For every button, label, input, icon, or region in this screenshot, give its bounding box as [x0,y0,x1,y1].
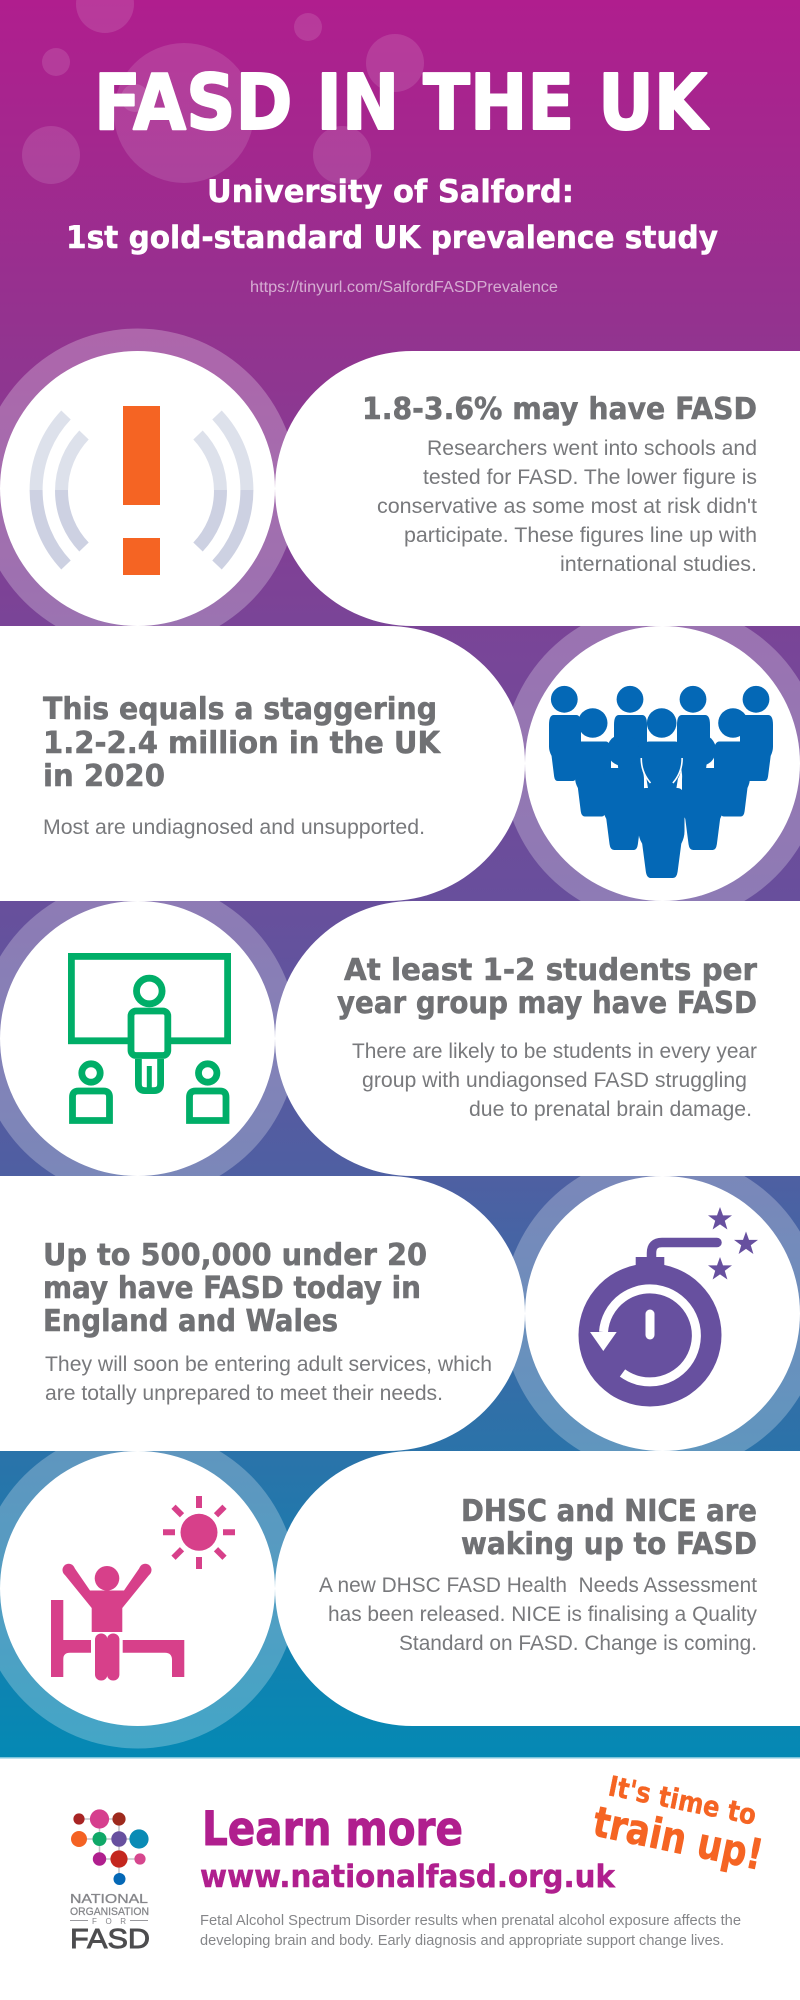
icon ring [0,1451,287,1748]
body text: A new DHSC FASD Health Needs Assessment [319,1574,757,1597]
heading: This equals a staggering [43,692,437,727]
icon ring [513,626,800,901]
panel: header [22,0,718,296]
footer description [200,1913,741,1949]
body text [352,1040,757,1121]
body text [45,1353,492,1405]
icon ring [0,901,287,1176]
heading: year group may have FASD [337,986,757,1021]
icon: person waking with sun [51,1496,235,1680]
heading: may have FASD today in [43,1271,421,1306]
footer top line [0,1757,800,1758]
heading: DHSC and NICE are [461,1494,757,1529]
footer description: developing brain and body. Early diagnosis and appropriate support change lives. [200,1933,724,1949]
decorative bubbles [22,0,424,184]
body text: Most are undiagnosed and unsupported. [43,816,425,839]
heading: England and Wales [43,1304,338,1339]
logo: National Organisation for FASD: ORGANISATION [70,1906,149,1918]
heading: Up to 500,000 under 20 [43,1238,427,1273]
footer description: Fetal Alcohol Spectrum Disorder results when prenatal alcohol exposure affects the [200,1913,741,1929]
panel: footer [0,1757,800,2000]
body text: Researchers went into schools and [427,437,757,460]
icon circle [0,351,275,626]
footer background [0,1757,800,2000]
icon: time bomb [578,1207,758,1406]
body text: There are likely to be students in every year [352,1040,757,1063]
panel: students per year group [0,901,800,1176]
panel: prevalence 1.8-3.6% [0,328,800,648]
body text: has been released. NICE is finalising a Quality [328,1603,757,1626]
website url: www.nationalfasd.org.uk [200,1859,616,1895]
text pill [275,1451,800,1726]
title: FASD IN THE UK [94,59,709,148]
icon: exclamation alert [36,406,247,575]
icon circle [525,626,800,901]
body text: conservative as some most at risk didn't [377,495,757,518]
heading: in 2020 [43,759,165,794]
learn more heading: Learn more [202,1802,463,1857]
icon circle [0,901,275,1176]
heading [43,692,442,794]
source link: https://tinyurl.com/SalfordFASDPrevalence [250,279,558,296]
text pill [0,626,525,901]
body text: They will soon be entering adult services, which [45,1353,492,1376]
subtitle line 1: University of Salford: [207,174,574,210]
icon: crowd of people [549,686,773,878]
heading: waking up to FASD [461,1527,757,1562]
heading: 1.8-3.6% may have FASD [362,392,757,427]
icon circle [0,1451,275,1726]
heading [461,1494,757,1562]
logo: National Organisation for FASD: FOR [92,1917,126,1926]
text pill [0,1176,525,1451]
callout: it's time to train up: train up! [589,1797,767,1880]
body text: due to prenatal brain damage. [469,1098,752,1121]
text pill [275,351,800,626]
body text: group with undiagonsed FASD struggling [362,1069,747,1092]
icon circle [525,1176,800,1451]
panel: DHSC and NICE [0,1428,800,1748]
logo: National Organisation for FASD: NATIONAL [70,1891,148,1906]
heading [43,1238,427,1339]
body text [377,437,757,576]
callout: it's time to train up: It's time to [606,1770,759,1832]
panel: 1.2-2.4 million [0,626,800,901]
logo: National Organisation for FASD: FASD [70,1923,150,1954]
heading: At least 1-2 students per [344,953,757,988]
body text: participate. These figures line up with [404,524,757,547]
heading: 1.2-2.4 million in the UK [43,726,442,761]
icon: teacher and students [71,956,228,1120]
logo: National Organisation for FASD [70,1809,150,1954]
heading [337,953,757,1021]
body text: international studies. [560,553,757,576]
panel: 500,000 under 20 [0,1176,800,1451]
body text: Standard on FASD. Change is coming. [399,1632,757,1655]
subtitle line 2: 1st gold-standard UK prevalence study [66,220,718,256]
icon ring [513,1176,800,1451]
body text [319,1574,757,1655]
body text: tested for FASD. The lower figure is [423,466,757,489]
callout: it's time to train up [589,1770,767,1880]
icon ring [0,328,287,626]
text pill [275,901,800,1176]
body text: are totally unprepared to meet their needs. [45,1382,443,1405]
